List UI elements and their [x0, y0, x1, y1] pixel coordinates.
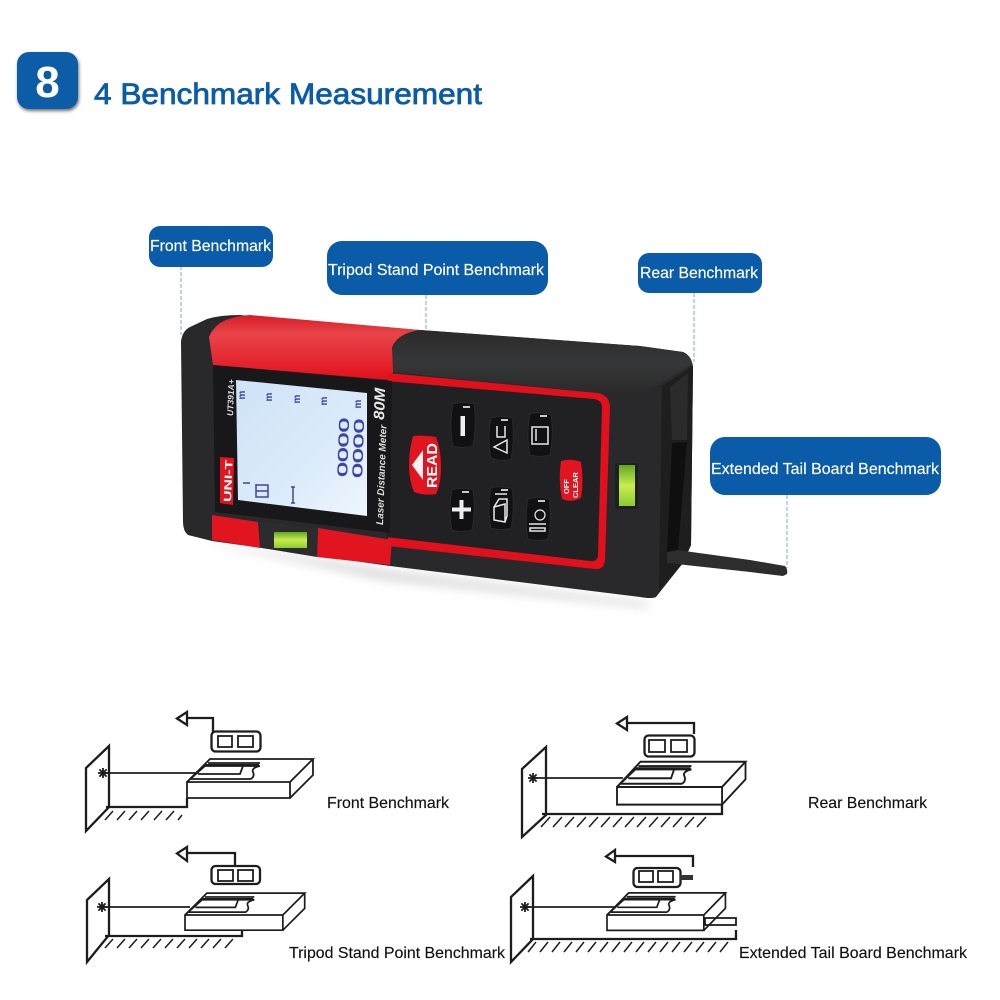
plus button [450, 488, 474, 532]
title: 4 Benchmark Measurement [94, 78, 483, 111]
step number badge: 8 [35, 58, 60, 107]
LCD unit marks: m [319, 396, 330, 405]
volume button [489, 487, 513, 530]
bottom red strips [212, 515, 260, 548]
bubble level right [615, 463, 638, 509]
LCD unit marks: m [353, 399, 364, 408]
diagram: extended tail board benchmark [511, 850, 736, 962]
top grip [392, 330, 692, 393]
off clear button: CLEAR [571, 472, 580, 498]
label: extended tail board benchmark: Extended Tail Board Benchmark [739, 945, 968, 962]
LCD digits: 0000 [334, 417, 352, 477]
timer button [526, 498, 550, 540]
screen panel [213, 365, 392, 533]
area button [528, 413, 552, 456]
red top strip [209, 315, 420, 380]
off clear button: OFF [562, 479, 571, 494]
callout: rear benchmark: Rear Benchmark [640, 265, 758, 282]
right end slot frame [659, 366, 693, 590]
right end slot upper [670, 373, 688, 440]
callout: extended tail board benchmark: Extended Tail Board Benchmark [711, 461, 939, 478]
LCD display [236, 380, 367, 516]
LCD digits [334, 417, 367, 478]
red keypad frame [388, 373, 610, 569]
keypad panel [386, 381, 602, 561]
callout: extended tail board benchmark [710, 437, 941, 495]
READ button: READ [424, 443, 441, 488]
tail board [667, 550, 787, 576]
callout: front benchmark [149, 226, 273, 267]
off clear button [560, 460, 582, 501]
leader lines [181, 266, 787, 568]
READ button [409, 436, 441, 495]
device body [181, 315, 693, 598]
LCD small symbols [243, 483, 295, 503]
UNI-T logo [220, 457, 235, 505]
label: front benchmark: Front Benchmark [327, 795, 450, 812]
LCD unit marks [237, 390, 364, 408]
LCD unit marks: m [237, 390, 248, 399]
LCD digits: 0000 [349, 418, 367, 478]
diagram: front benchmark [86, 712, 313, 831]
product name: Laser Distance Meter [375, 424, 390, 525]
callout: tripod stand point benchmark: Tripod Stand Point Benchmark [328, 262, 544, 279]
capacity label: 80M [371, 387, 389, 420]
diagram: rear benchmark [522, 717, 746, 837]
minus button [451, 402, 475, 448]
bubble level bottom [274, 532, 307, 548]
label: tripod stand point benchmark: Tripod Stand Point Benchmark [289, 945, 506, 962]
callout: tripod stand point benchmark [327, 241, 548, 295]
laser distance meter device [181, 315, 787, 608]
angle button [489, 416, 513, 460]
callout: rear benchmark [638, 253, 762, 293]
device shadow [195, 540, 650, 608]
LCD unit marks: m [292, 394, 303, 403]
right end slot lower [667, 442, 687, 553]
callout: front benchmark: Front Benchmark [150, 238, 271, 255]
label: rear benchmark: Rear Benchmark [808, 795, 928, 812]
UNI-T logo: UNI-T [222, 459, 235, 502]
level housing bottom [258, 522, 318, 557]
step number badge [17, 52, 78, 109]
LCD unit marks: m [264, 392, 275, 401]
model label: UT391A+ [225, 379, 236, 416]
diagram: tripod stand point benchmark [87, 847, 305, 962]
